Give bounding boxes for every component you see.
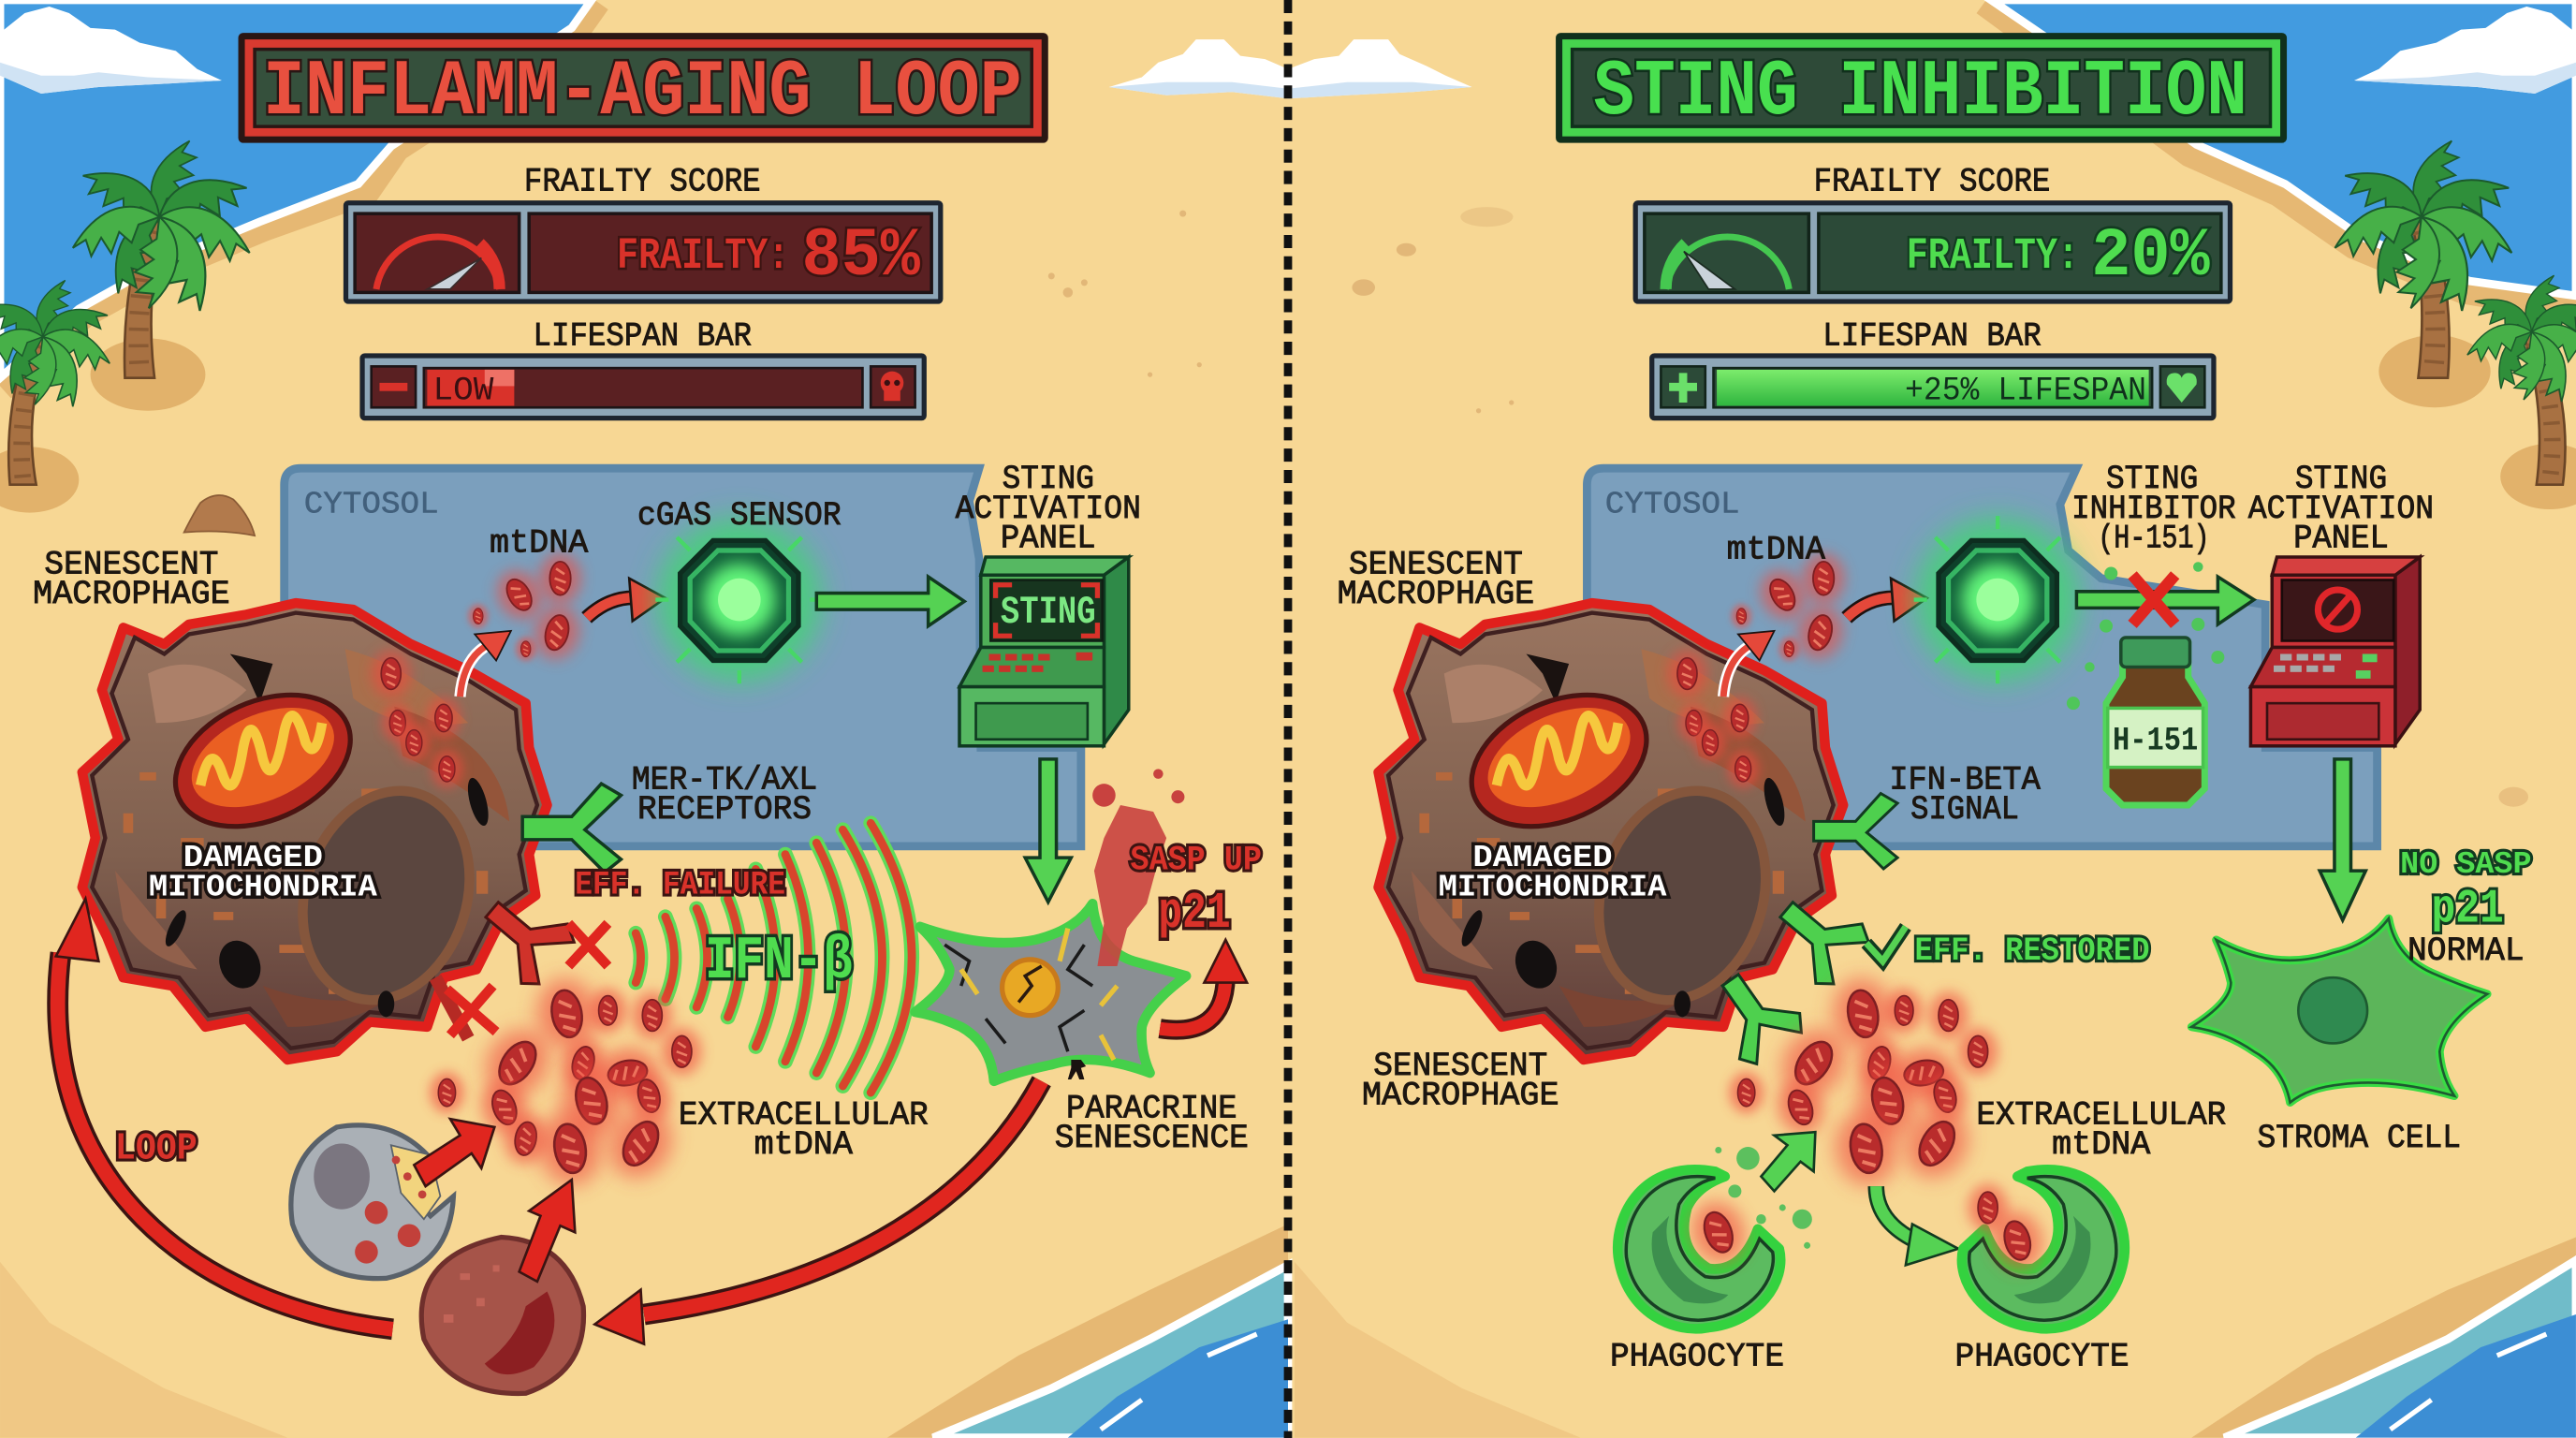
gauge: low frailty xyxy=(1666,237,1789,289)
label: senescent macrophage right top: MACROPHAGE xyxy=(1338,576,1534,613)
label: p21 normal: NORMAL xyxy=(2408,932,2525,970)
label: paracrine senescence: SENESCENCE xyxy=(1055,1120,1249,1157)
palm trees: left xyxy=(0,136,256,513)
palm trees: right xyxy=(2331,136,2576,509)
green receptor right middle xyxy=(1763,881,1875,992)
damaged mitochondria label: DAMAGED xyxy=(1472,841,1613,876)
STING activation machine: green: STING xyxy=(1001,590,1096,635)
label: p21 normal: p21 xyxy=(2431,884,2504,937)
label: extracellular mtDNA left: EXTRACELLULAR xyxy=(679,1096,929,1134)
stroma cell healthy xyxy=(2191,918,2487,1103)
label: senescent macrophage right bottom: MACROPHAGE xyxy=(1362,1077,1559,1114)
STING activation machine: green xyxy=(959,557,1129,746)
arrow: paracrine back to red cell xyxy=(594,1081,1042,1344)
arrow: p21 up curved xyxy=(1160,940,1247,1030)
arrow: phagocyte to mtDNA xyxy=(1761,1132,1815,1191)
label: STING inhibitor xyxy=(2071,461,2236,557)
label: STING inhibitor: STING xyxy=(2106,461,2198,498)
rock xyxy=(184,495,255,536)
label: IFN-beta signal xyxy=(1889,761,2042,829)
label: p21 up: p21 xyxy=(1158,886,1231,943)
label: extracellular mtDNA left xyxy=(679,1096,929,1164)
label: sting activation panel left xyxy=(956,461,1141,557)
label: sting activation panel left: ACTIVATION xyxy=(956,491,1141,528)
ocean: top right xyxy=(1986,0,2576,305)
label: extracellular mtDNA left: mtDNA xyxy=(754,1126,854,1164)
label: MER-TK/AXL receptors xyxy=(632,761,817,829)
label: IFN-beta signal: IFN-BETA xyxy=(1889,761,2042,799)
label: SASP up: SASP UP xyxy=(1131,841,1262,880)
red X block xyxy=(2132,575,2175,624)
frailty value: 85% xyxy=(802,218,921,296)
label: senescent macrophage right bottom xyxy=(1362,1048,1559,1114)
label: extracellular mtDNA right: mtDNA xyxy=(2052,1126,2151,1164)
ocean: bottom of right panel xyxy=(2191,1238,2576,1438)
cytosolic mtDNA left xyxy=(468,553,585,664)
phagocyte left xyxy=(1617,1169,1780,1328)
arrow: STING down to stroma right xyxy=(2320,759,2365,920)
label: senescent macrophage left xyxy=(33,547,230,613)
blocked receptor 2 xyxy=(435,977,496,1038)
arrow: mtDNA to cGAS right xyxy=(1847,579,1927,621)
label: sting activation panel left: STING xyxy=(1003,461,1094,498)
labels: phagocytes xyxy=(1610,1338,2130,1375)
damaged mitochondria label xyxy=(149,841,377,905)
gauge: high frailty xyxy=(376,237,500,289)
label: MER-TK/AXL receptors: MER-TK/AXL xyxy=(632,761,817,799)
arrow: escape from cell right xyxy=(1723,631,1774,697)
label: senescent macrophage right top: SENESCENT xyxy=(1349,547,1523,584)
labels: phagocytes: PHAGOCYTE xyxy=(1955,1338,2130,1375)
senescent macrophage: right xyxy=(1379,603,1843,1060)
label: IFN-beta: IFN-β xyxy=(705,928,853,996)
icon: heart xyxy=(2167,373,2197,403)
damaged mitochondria label: MITOCHONDRIA xyxy=(149,870,377,905)
signal waves: IFN-beta xyxy=(636,823,912,1093)
label: stroma cell: STROMA CELL xyxy=(2257,1120,2461,1157)
red cell xyxy=(421,1238,583,1393)
lifespan label: left: LIFESPAN BAR xyxy=(534,318,752,356)
label: senescent macrophage right bottom: SENESCENT xyxy=(1373,1048,1547,1085)
darker sand: bottom left corners xyxy=(0,1262,1580,1438)
panel: cytosol left xyxy=(285,468,1081,846)
arrow: escape from cell left xyxy=(460,631,511,697)
cGAS sensor octagon right xyxy=(1914,516,2080,683)
arrow: STING down to stroma left xyxy=(1025,759,1071,902)
label: senescent macrophage left: SENESCENT xyxy=(44,547,218,584)
lifespan bar: left xyxy=(359,353,927,420)
icon: skull xyxy=(881,372,903,401)
damaged mitochondria label: MITOCHONDRIA xyxy=(1439,870,1667,905)
blocked receptor 1 xyxy=(468,881,607,992)
icon: small figure xyxy=(1068,1060,1086,1079)
damaged mitochondria label xyxy=(1439,841,1667,905)
label: cGAS sensor: cGAS SENSOR xyxy=(637,497,842,535)
senescent macrophage: left xyxy=(82,603,547,1060)
engulfed mtDNA xyxy=(1683,1195,1753,1270)
frailty score label: left: FRAILTY SCORE xyxy=(524,164,761,201)
stromal senescent star cell xyxy=(915,903,1186,1081)
green receptor left xyxy=(522,784,621,873)
lifespan label: right: LIFESPAN BAR xyxy=(1822,318,2042,356)
label: paracrine senescence: PARACRINE xyxy=(1066,1090,1237,1127)
label: STING inhibitor: (H-151) xyxy=(2098,520,2210,557)
label: mtDNA right: mtDNA xyxy=(1727,532,1826,569)
arrow: cGAS to STING blocked xyxy=(2076,577,2254,624)
label: no SASP: NO SASP xyxy=(2400,847,2532,883)
frailty value xyxy=(1907,218,2210,296)
grey apoptotic cell xyxy=(291,1125,453,1279)
H-151 bottle xyxy=(2106,638,2204,805)
title: Inflamm-Aging Loop: INFLAMM-AGING LOOP xyxy=(263,49,1022,138)
extracellular mtDNA cluster left xyxy=(430,974,701,1190)
lifespan bar: left: LOW xyxy=(433,372,494,409)
label: efferocytosis failure: EFF. FAILURE xyxy=(575,867,785,904)
label: sting activation panel right: STING xyxy=(2295,461,2387,498)
label: IFN-beta signal: SIGNAL xyxy=(1910,791,2019,829)
icon: no symbol xyxy=(2318,590,2358,629)
label: extracellular mtDNA right: EXTRACELLULAR xyxy=(1976,1096,2226,1134)
green check xyxy=(1866,927,1906,961)
sand details xyxy=(1048,207,2528,807)
divider xyxy=(1286,0,1290,1438)
panel: cytosol right xyxy=(1587,468,2378,846)
label: sting activation panel right xyxy=(2248,461,2434,557)
label: MER-TK/AXL receptors: RECEPTORS xyxy=(637,791,812,829)
frailty panel: right xyxy=(1633,200,2232,304)
labels: phagocytes: PHAGOCYTE xyxy=(1610,1338,1784,1375)
frailty value xyxy=(617,218,921,296)
arrow: cGAS to STING left xyxy=(816,577,964,626)
ocean: top left xyxy=(0,0,594,386)
green particles xyxy=(2067,562,2224,710)
label: sting activation panel right: ACTIVATION xyxy=(2248,491,2434,528)
arrow: mtDNA to cGAS left xyxy=(587,579,666,621)
clouds xyxy=(0,7,2576,98)
label: sting activation panel right: PANEL xyxy=(2293,520,2389,557)
debris particles xyxy=(1715,1147,1812,1249)
frailty value: FRAILTY: xyxy=(617,232,789,282)
label: paracrine senescence xyxy=(1055,1090,1249,1157)
organelle mtDNA specks xyxy=(372,650,463,788)
cytosol label: CYTOSOL xyxy=(304,488,439,523)
label: extracellular mtDNA right xyxy=(1976,1096,2226,1164)
damaged mitochondria label: DAMAGED xyxy=(183,841,323,876)
phagocyte right xyxy=(1962,1169,2125,1328)
red X xyxy=(568,923,607,966)
SASP smoke xyxy=(1092,769,1184,966)
arrow: mtDNA to second phagocyte xyxy=(1876,1186,1958,1265)
ocean: bottom of left panel xyxy=(887,1224,1288,1438)
label: loop: LOOP xyxy=(115,1127,198,1170)
label: senescent macrophage left: MACROPHAGE xyxy=(33,576,230,613)
cytosol label: CYTOSOL xyxy=(1605,488,1740,523)
cytosolic mtDNA right xyxy=(1732,553,1849,664)
frailty value: 20% xyxy=(2091,218,2210,296)
label: p21 normal xyxy=(2408,884,2525,970)
arrow: grey cell to mtDNA xyxy=(414,1119,494,1186)
frailty value: FRAILTY: xyxy=(1907,232,2079,282)
title: STING Inhibition: STING INHIBITION xyxy=(1593,49,2247,138)
organelle mtDNA specks xyxy=(1667,650,1759,788)
extracellular mtDNA cluster right xyxy=(1729,974,1998,1190)
green receptor right lower xyxy=(1700,959,1809,1070)
frailty score label: right: FRAILTY SCORE xyxy=(1814,164,2050,201)
label: mtDNA left: mtDNA xyxy=(490,525,589,563)
arrow: red cell to mtDNA xyxy=(520,1180,575,1282)
H-151 bottle: H-151 xyxy=(2113,722,2198,759)
engulfed mtDNA xyxy=(1969,1184,2049,1275)
cGAS sensor octagon left xyxy=(655,518,823,683)
lifespan bar: right: +25% LIFESPAN xyxy=(1905,372,2146,409)
green receptor right top xyxy=(1814,794,1897,869)
label: senescent macrophage right top xyxy=(1338,547,1534,613)
arrow: loop back xyxy=(56,899,393,1329)
lifespan bar: right xyxy=(1649,353,2217,420)
frailty panel: left xyxy=(344,200,943,304)
label: sting activation panel left: PANEL xyxy=(1001,520,1096,557)
label: STING inhibitor: INHIBITOR xyxy=(2071,491,2236,528)
label: efferocytosis restored: EFF. RESTORED xyxy=(1915,932,2150,970)
STING machine: red inhibited xyxy=(2250,557,2420,746)
